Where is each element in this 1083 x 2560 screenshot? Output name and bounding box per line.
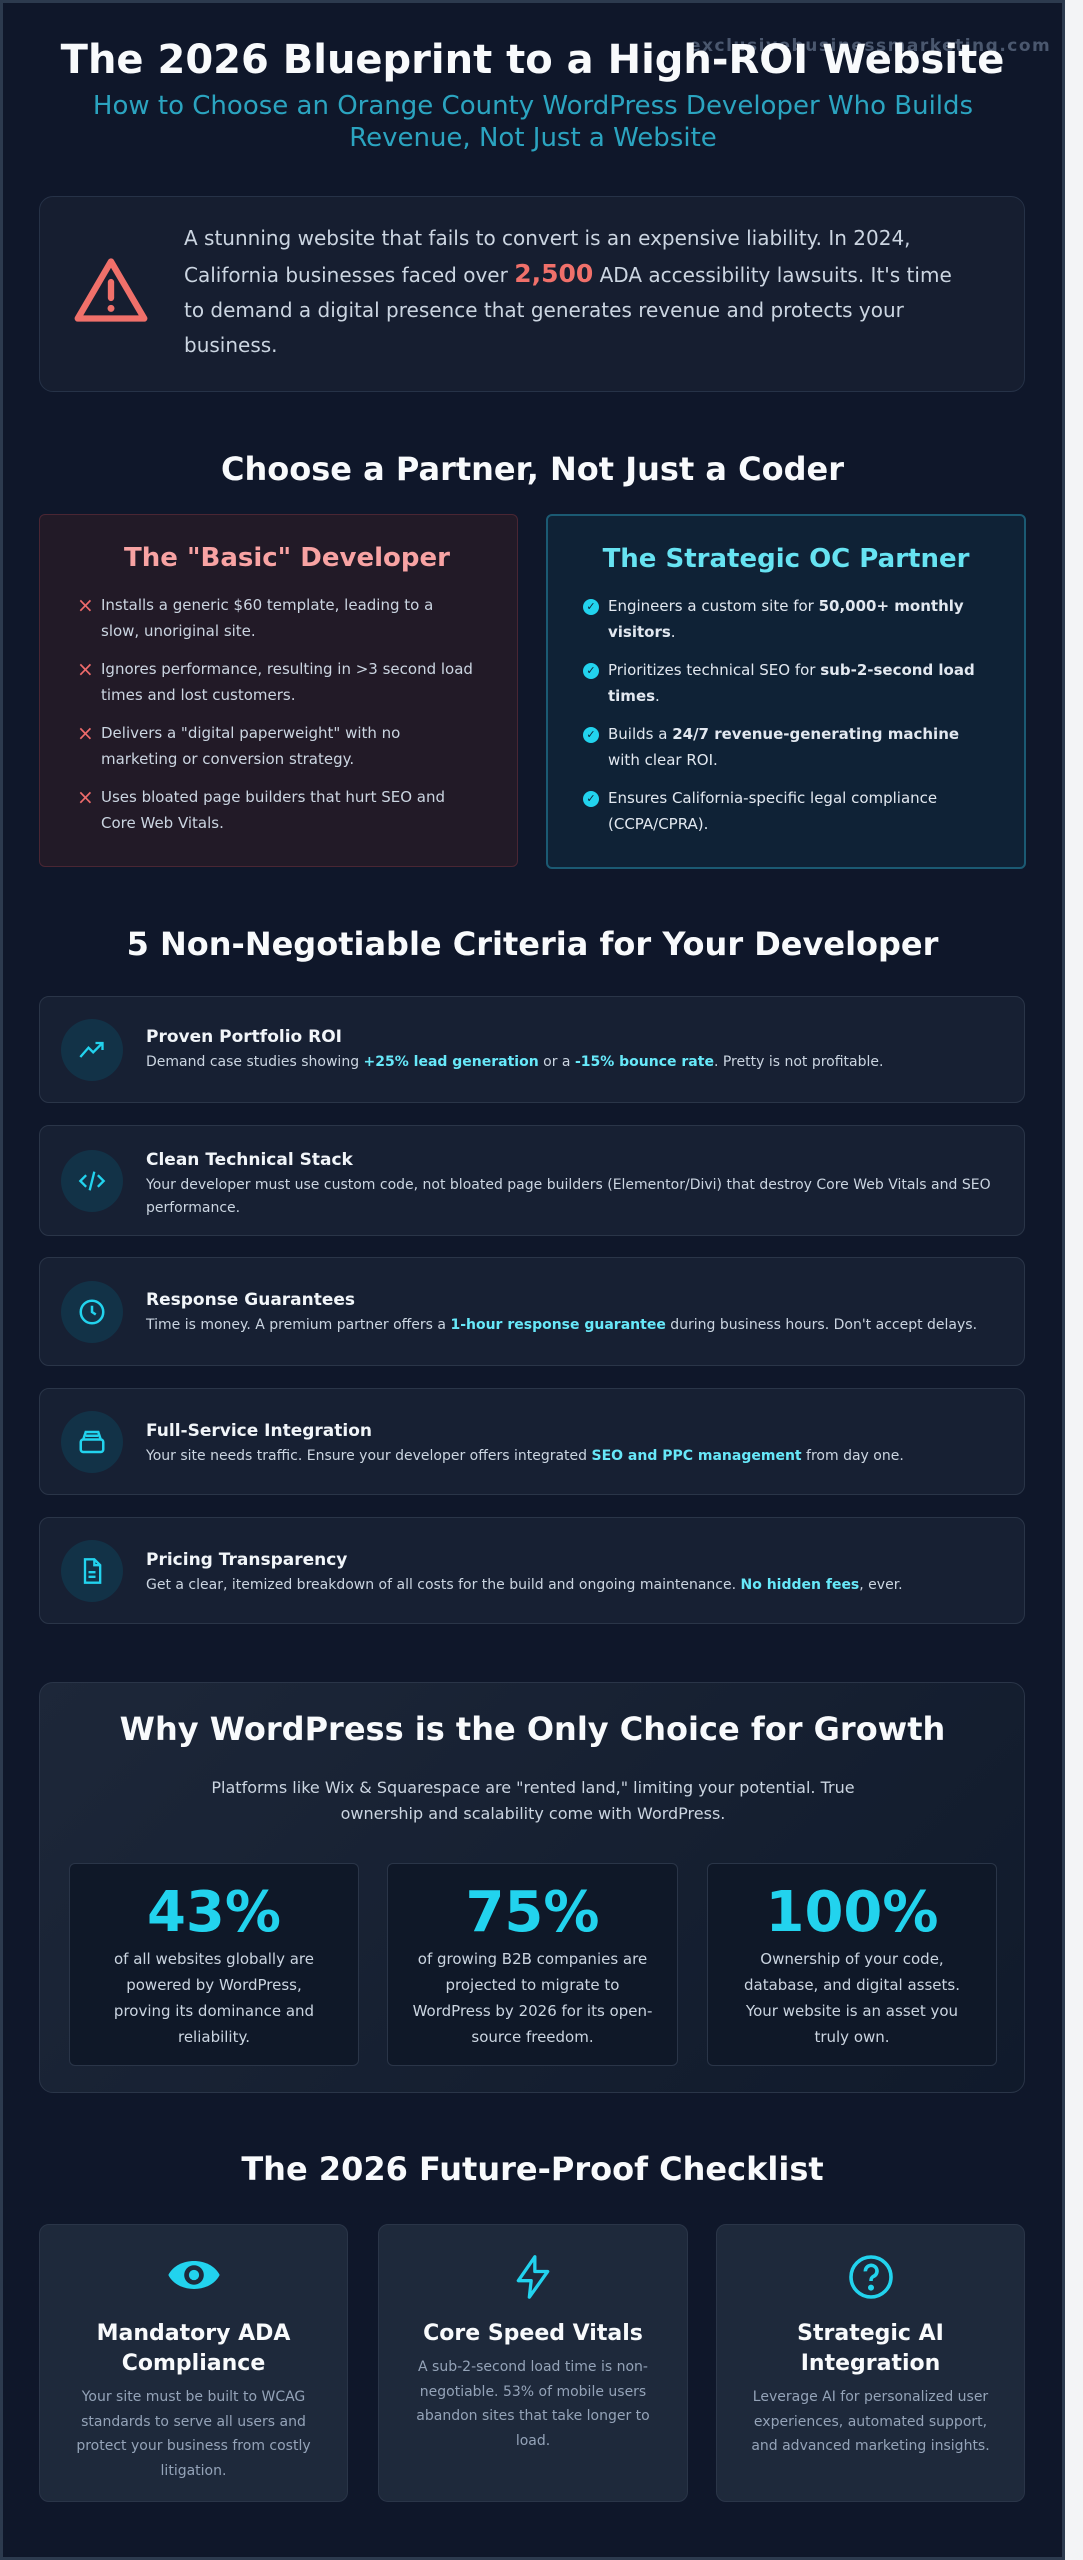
criterion: pricing: Pricing Transparency: [146, 1550, 347, 1570]
checklist: ADA: Mandatory ADA Compliance: [97, 2321, 290, 2376]
stat: 100%: [707, 1863, 997, 2066]
stat: 43%: 43%: [147, 1880, 281, 1945]
icon: question circle: [849, 2255, 893, 2299]
wordpress intro text: Platforms like Wix & Squarespace are "rented land," limiting your potential. True ownership and scalability come with WordPress.: [211, 1778, 855, 1823]
panel title: The "Basic" Developer: [124, 543, 450, 573]
stat: 43%: [69, 1863, 359, 2066]
criterion: tech stack: Clean Technical Stack: [146, 1150, 353, 1170]
subtitle: How to Choose an Orange County WordPress Developer Who Builds Revenue, Not Just a Website: [93, 91, 973, 153]
title: The 2026 Blueprint to a High-ROI Website: [61, 37, 1004, 83]
stat: 100%: 100%: [765, 1880, 938, 1945]
checklist: speed: [378, 2224, 688, 2502]
checklist: AI: Strategic AI Integration: [797, 2321, 944, 2376]
criterion: pricing: Get a clear, itemized breakdown of all costs for the build and ongoing maintenance. No hidden fees, ever.: [146, 1577, 903, 1593]
heading: why wordpress: Why WordPress is the Only Choice for Growth: [120, 1710, 945, 1748]
criterion: full-service: Full-Service Integration: [146, 1421, 372, 1441]
panel: basic developer: [39, 514, 518, 867]
panel: strategic partner: Engineers a custom site for 50,000+ monthly visitors.: [608, 597, 964, 641]
criterion: response: Response Guarantees: [146, 1290, 355, 1310]
panel: strategic partner: [546, 514, 1026, 869]
panel: strategic partner: ✓: [586, 600, 596, 613]
watermark: exclusivebusinessmarketing.com: [689, 36, 1051, 56]
checklist: speed: Core Speed Vitals: [423, 2321, 643, 2346]
heading: checklist: The 2026 Future-Proof Checklist: [241, 2150, 824, 2188]
criterion: response: Time is money. A premium partner offers a 1-hour response guarantee during business hours. Don't accept delays.: [146, 1317, 977, 1333]
stat: 75%: of growing B2B companies are projected to migrate to WordPress by 2026 for its open-source freedom.: [413, 1950, 652, 2046]
heading: 5 criteria: 5 Non-Negotiable Criteria for Your Developer: [127, 925, 938, 963]
panel: strategic partner: ✓: [586, 664, 596, 677]
panel: strategic partner: Prioritizes technical SEO for sub-2-second load times.: [608, 661, 975, 705]
icon: lightning: [516, 2255, 550, 2299]
criterion: full-service: [39, 1388, 1025, 1495]
criterion: response: [39, 1257, 1025, 1366]
stat: 43%: of all websites globally are powered by WordPress, proving its dominance and reliability.: [114, 1950, 314, 2046]
panel: strategic partner: ✓: [586, 792, 596, 805]
panel: basic developer: ×: [77, 721, 94, 745]
stat: 100%: Ownership of your code, database, and digital assets. Your website is an asset you truly own.: [744, 1950, 960, 2046]
criterion: pricing: [39, 1517, 1025, 1624]
icon: trend: [61, 1019, 123, 1081]
stat: 75%: [387, 1863, 678, 2066]
heading: choose a partner: Choose a Partner, Not Just a Coder: [221, 450, 844, 488]
panel: basic developer: Installs a generic $60 template, leading to a slow, unoriginal site.: [101, 596, 433, 640]
icon: eye: [168, 2261, 220, 2289]
checklist: ADA: Your site must be built to WCAG standards to serve all users and protect your business from costly litigation.: [76, 2389, 311, 2478]
checklist: AI: Leverage AI for personalized user experiences, automated support, and advanced marketing insights.: [751, 2389, 990, 2454]
criterion: tech stack: Your developer must use custom code, not bloated page builders (Elementor/Divi) that destroy Core Web Vitals and SEO performance.: [146, 1177, 991, 1216]
criterion: tech stack: [39, 1125, 1025, 1236]
icon: clock: [61, 1281, 123, 1343]
panel: strategic partner: ✓: [586, 728, 596, 741]
criterion: portfolio ROI: Proven Portfolio ROI: [146, 1027, 342, 1047]
criterion: portfolio ROI: Demand case studies showing +25% lead generation or a -15% bounce rate. Pretty is not profitable.: [146, 1054, 883, 1070]
stat: 75%: 75%: [465, 1880, 600, 1945]
criterion: full-service: Your site needs traffic. Ensure your developer offers integrated SEO and PPC management from day one.: [146, 1448, 904, 1464]
icon: warning triangle: [74, 258, 148, 322]
panel: why wordpress: [39, 1682, 1025, 2093]
panel: strategic partner: Ensures California-specific legal compliance (CCPA/CPRA).: [608, 789, 937, 833]
panel: basic developer: ×: [77, 657, 94, 681]
panel: basic developer: Ignores performance, resulting in >3 second load times and lost customers.: [101, 660, 473, 704]
checklist: speed: A sub-2-second load time is non-negotiable. 53% of mobile users abandon sites that take longer to load.: [416, 2359, 650, 2448]
icon: briefcase: [61, 1411, 123, 1473]
icon: document: [61, 1540, 123, 1602]
criterion: portfolio ROI: [39, 996, 1025, 1103]
checklist: ADA: [39, 2224, 348, 2502]
callout: ADA warning: [39, 196, 1025, 392]
panel title: The Strategic OC Partner: [603, 544, 969, 574]
icon: code: [61, 1150, 123, 1212]
panel: basic developer: ×: [77, 785, 94, 809]
callout text: A stunning website that fails to convert is an expensive liability. In 2024, California businesses faced over 2,500 ADA accessibility lawsuits. It's time to demand a digital presence that generates revenue and protects your business.: [184, 226, 952, 357]
checklist: AI: [716, 2224, 1025, 2502]
panel: basic developer: Uses bloated page builders that hurt SEO and Core Web Vitals.: [101, 788, 445, 832]
panel: strategic partner: Builds a 24/7 revenue-generating machine with clear ROI.: [608, 725, 959, 769]
panel: basic developer: Delivers a "digital paperweight" with no marketing or conversion strategy.: [101, 724, 400, 768]
panel: basic developer: ×: [77, 593, 94, 617]
